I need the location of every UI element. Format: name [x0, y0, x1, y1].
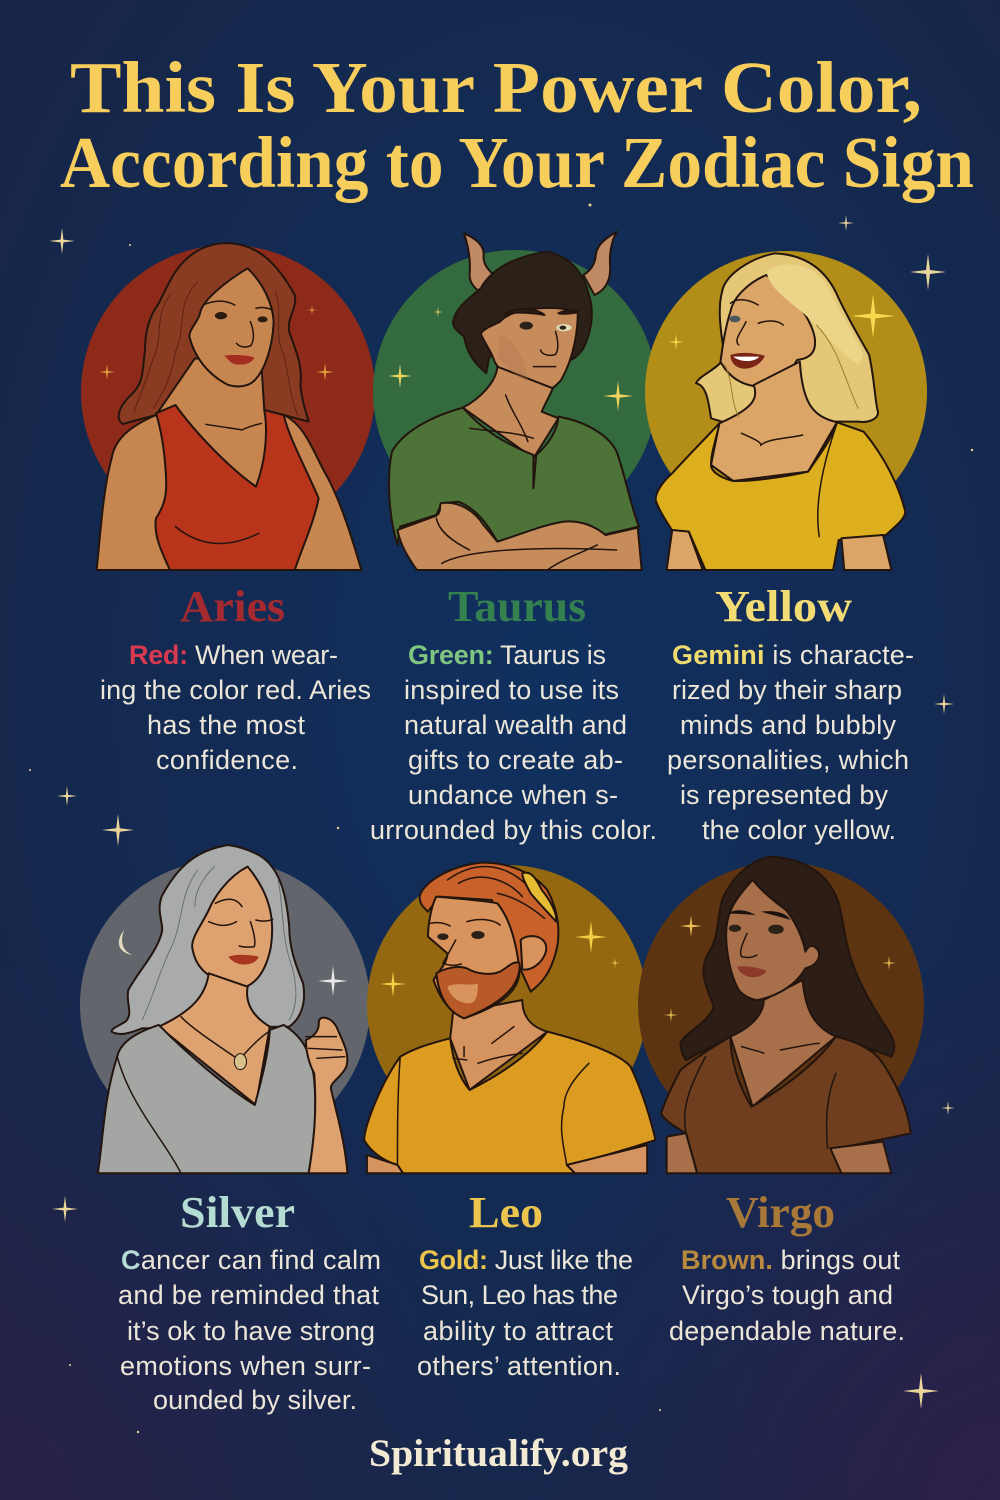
body: minds and bubbly	[680, 710, 896, 740]
portrait: Aries	[81, 243, 375, 570]
body: Gold: Just like the	[419, 1245, 633, 1275]
heading: Leo	[469, 1188, 543, 1237]
footer: Spiritualify.org	[369, 1432, 629, 1475]
card: Taurus	[370, 582, 657, 845]
portrait: Leo	[364, 863, 656, 1173]
portrait: Cancer	[80, 845, 370, 1173]
sparkles	[99, 305, 334, 381]
hair strands	[134, 282, 298, 415]
title: This Is Your Power Color,	[70, 47, 922, 128]
body: Red: When wear-	[129, 640, 338, 670]
red circle	[81, 245, 375, 539]
silver circle	[80, 860, 370, 1150]
body: Brown. brings out	[681, 1245, 900, 1275]
body: others’ attention.	[417, 1351, 621, 1381]
card: Gemini	[667, 582, 914, 845]
body: confidence.	[156, 745, 298, 775]
body: gifts to create ab-	[408, 745, 623, 775]
body: Sun, Leo has the	[421, 1280, 618, 1310]
body: natural wealth and	[404, 710, 627, 740]
body	[370, 640, 657, 845]
card: Cancer	[118, 1188, 381, 1415]
body: is represented by	[680, 780, 888, 810]
title: According to Your Zodiac Sign	[60, 122, 974, 203]
body: undance when s-	[408, 780, 618, 810]
sparkles	[664, 915, 896, 1022]
body: and be reminded that	[118, 1280, 379, 1310]
green circle	[373, 250, 657, 534]
hair strands	[142, 867, 296, 1020]
sparkles	[380, 921, 620, 997]
body: dependable nature.	[669, 1316, 905, 1346]
figure	[661, 857, 911, 1173]
gold circle	[367, 865, 647, 1145]
body: inspired to use its	[404, 675, 619, 705]
body	[667, 640, 914, 845]
heading: Virgo	[726, 1188, 835, 1237]
heading: Silver	[180, 1188, 295, 1237]
body: urrounded by this color.	[370, 815, 657, 845]
sparkles	[388, 307, 633, 411]
body: personalities, which	[667, 745, 909, 775]
body	[417, 1245, 633, 1381]
yellow circle	[645, 251, 927, 533]
figure	[97, 243, 361, 570]
body: Virgo’s tough and	[682, 1280, 893, 1310]
heading: Aries	[180, 582, 285, 631]
body: has the most	[147, 710, 305, 740]
figure	[656, 253, 905, 570]
body: ability to attract	[423, 1316, 613, 1346]
heading: Yellow	[715, 582, 852, 631]
body: ounded by silver.	[153, 1385, 357, 1415]
portrait: Virgo	[638, 857, 924, 1173]
body	[669, 1245, 905, 1346]
card: Aries	[100, 582, 371, 775]
body	[100, 640, 371, 775]
body: ing the color red. Aries	[100, 675, 371, 705]
body: the color yellow.	[702, 815, 896, 845]
body: emotions when surr-	[120, 1351, 371, 1381]
decorative stars	[29, 204, 973, 1433]
title	[60, 47, 974, 203]
body: it’s ok to have strong	[127, 1316, 375, 1346]
body	[118, 1245, 381, 1415]
brown circle	[638, 862, 924, 1148]
card: Virgo	[669, 1188, 905, 1346]
portrait: Gemini	[645, 251, 927, 570]
card: Leo	[417, 1188, 633, 1381]
figure	[389, 232, 642, 570]
sparkles	[668, 294, 895, 350]
body: Green: Taurus is	[408, 640, 606, 670]
body: Gemini is characte-	[672, 640, 914, 670]
moon and sparkle	[119, 930, 348, 996]
portrait: Taurus	[373, 232, 657, 570]
figure	[364, 863, 656, 1173]
heading: Taurus	[448, 582, 586, 631]
body: rized by their sharp	[672, 675, 902, 705]
body: Cancer can find calm	[121, 1245, 381, 1275]
figure	[98, 845, 348, 1173]
